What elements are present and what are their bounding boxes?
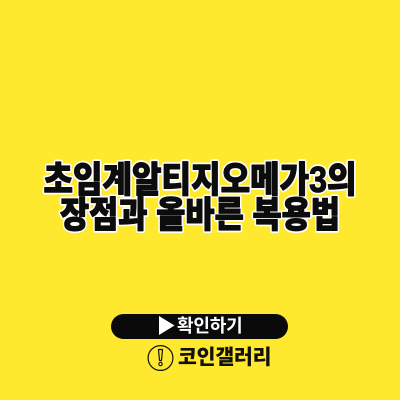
icon: play triangle xyxy=(159,316,174,335)
title: 초임계알티지오메가3의 xyxy=(44,159,356,200)
title: 장점과 올바른 복용법 xyxy=(60,194,340,235)
title xyxy=(42,159,356,235)
title: 초임계알티지오메가3의 xyxy=(44,159,356,200)
icon: exclamation circle xyxy=(148,345,174,371)
title: 장점과 올바른 복용법 xyxy=(60,194,340,235)
button: confirm xyxy=(111,314,288,339)
brand name: 코인갤러리 xyxy=(178,346,271,369)
button label: 확인하기 xyxy=(177,316,242,336)
